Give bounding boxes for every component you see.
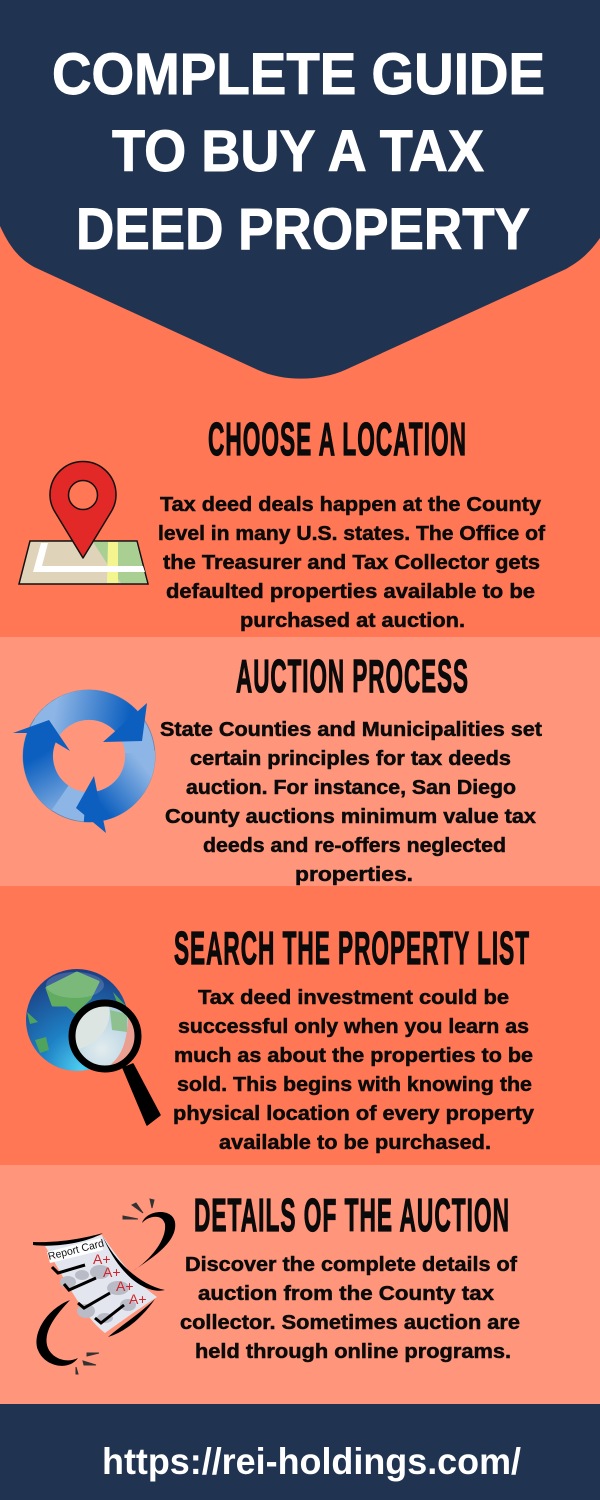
- text block: deeds and re-offers neglected: [203, 835, 506, 857]
- text block: defaulted properties available to be: [166, 581, 535, 603]
- text block: [160, 719, 542, 886]
- title: [52, 42, 545, 262]
- icon: circular arrows: [13, 690, 155, 833]
- icon: report card: [33, 1199, 175, 1374]
- text block: [173, 987, 535, 1154]
- text block: Tax deed investment could be: [198, 987, 509, 1009]
- icon: report card: A+: [93, 1251, 111, 1267]
- text block: sold. This begins with knowing the: [177, 1074, 532, 1096]
- footer url: https://rei-holdings.com/: [102, 1441, 521, 1482]
- text block: properties.: [295, 864, 413, 886]
- icon: report card: A+: [129, 1291, 147, 1307]
- text block: available to be purchased.: [219, 1132, 491, 1154]
- text block: held through online programs.: [195, 1341, 511, 1363]
- text block: Tax deed deals happen at the County: [160, 494, 542, 516]
- text block: physical location of every property: [173, 1103, 535, 1125]
- text block: Discover the complete details of: [185, 1254, 517, 1276]
- text block: State Counties and Municipalities set: [160, 719, 542, 741]
- title: COMPLETE GUIDE: [52, 42, 545, 107]
- text block: auction. For instance, San Diego: [186, 777, 516, 799]
- text block: [180, 1254, 520, 1363]
- panel: choose a location: [19, 413, 545, 632]
- icon: report card: A+: [103, 1264, 121, 1280]
- icon: map pin: [19, 462, 148, 584]
- icon: report card: Report Card: [47, 1237, 105, 1263]
- text block: level in many U.S. states. The Office of: [158, 523, 545, 545]
- text block: County auctions minimum value tax: [165, 806, 536, 828]
- title: TO BUY A TAX: [112, 119, 484, 184]
- text block: [158, 494, 545, 632]
- footer: [0, 1404, 600, 1500]
- text block: much as about the properties to be: [174, 1045, 533, 1067]
- text block: purchased at auction.: [240, 610, 465, 632]
- panel: search the property list: [26, 922, 535, 1154]
- panel: auction process: [13, 650, 542, 886]
- header banner: [0, 0, 600, 379]
- text block: the Treasurer and Tax Collector gets: [163, 552, 540, 574]
- text block: auction from the County tax: [198, 1283, 494, 1305]
- panel: details of the auction: [33, 1189, 520, 1374]
- text block: collector. Sometimes auction are: [180, 1312, 520, 1334]
- icon: report card: A+: [116, 1278, 134, 1294]
- text block: successful only when you learn as: [178, 1016, 529, 1038]
- text block: certain principles for tax deeds: [190, 748, 511, 770]
- icon: globe and magnifier: [26, 969, 160, 1125]
- title: DEED PROPERTY: [76, 197, 530, 262]
